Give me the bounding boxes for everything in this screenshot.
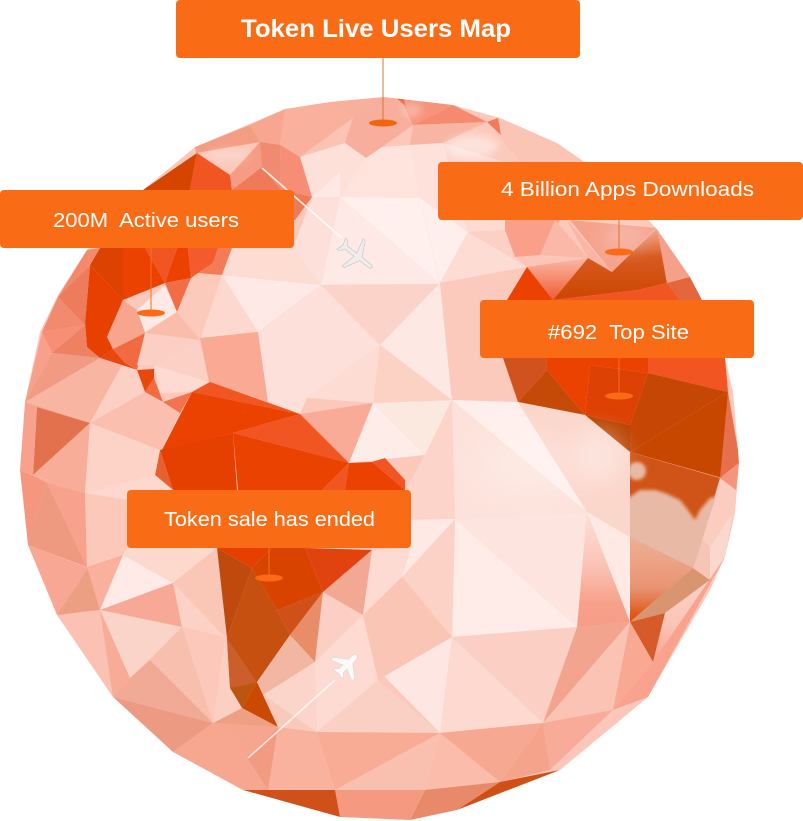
marker: top site pin (605, 358, 633, 400)
callout: app downloads (438, 162, 803, 220)
title text: Token Live Users Map (241, 15, 511, 43)
region: north polar facets (195, 97, 620, 232)
region: southern facets (113, 548, 452, 820)
region: western facets (20, 248, 242, 723)
marker: app downloads pin (605, 220, 633, 256)
callout: token sale: Token sale has ended (164, 509, 375, 531)
icon: upper airplane (331, 230, 382, 281)
callout: app downloads: 4 Billion Apps Downloads (501, 179, 754, 201)
callout: top site (480, 300, 754, 358)
icon: lower airplane (327, 644, 368, 685)
cloud over Australia (630, 460, 716, 568)
region: North America (85, 142, 312, 402)
flight trail: upper plane (262, 168, 342, 238)
callout: token sale (127, 490, 411, 548)
flight trail: lower plane (248, 680, 335, 758)
clouds: soft white overlays (206, 102, 649, 495)
callout: active users (0, 190, 294, 248)
marker: active users pin (137, 248, 165, 316)
region: lower right ocean and Australia (380, 400, 739, 820)
marker: title pin (369, 58, 397, 126)
callout: top site: #692 Top Site (548, 322, 689, 344)
region: central ocean facets (222, 172, 527, 548)
region: South America (155, 382, 405, 727)
marker: token sale pin (255, 548, 283, 582)
low-poly globe (20, 97, 739, 820)
region: Europe and Asia (468, 220, 739, 478)
callout: active users: 200M Active users (53, 210, 239, 232)
title banner (176, 0, 580, 58)
